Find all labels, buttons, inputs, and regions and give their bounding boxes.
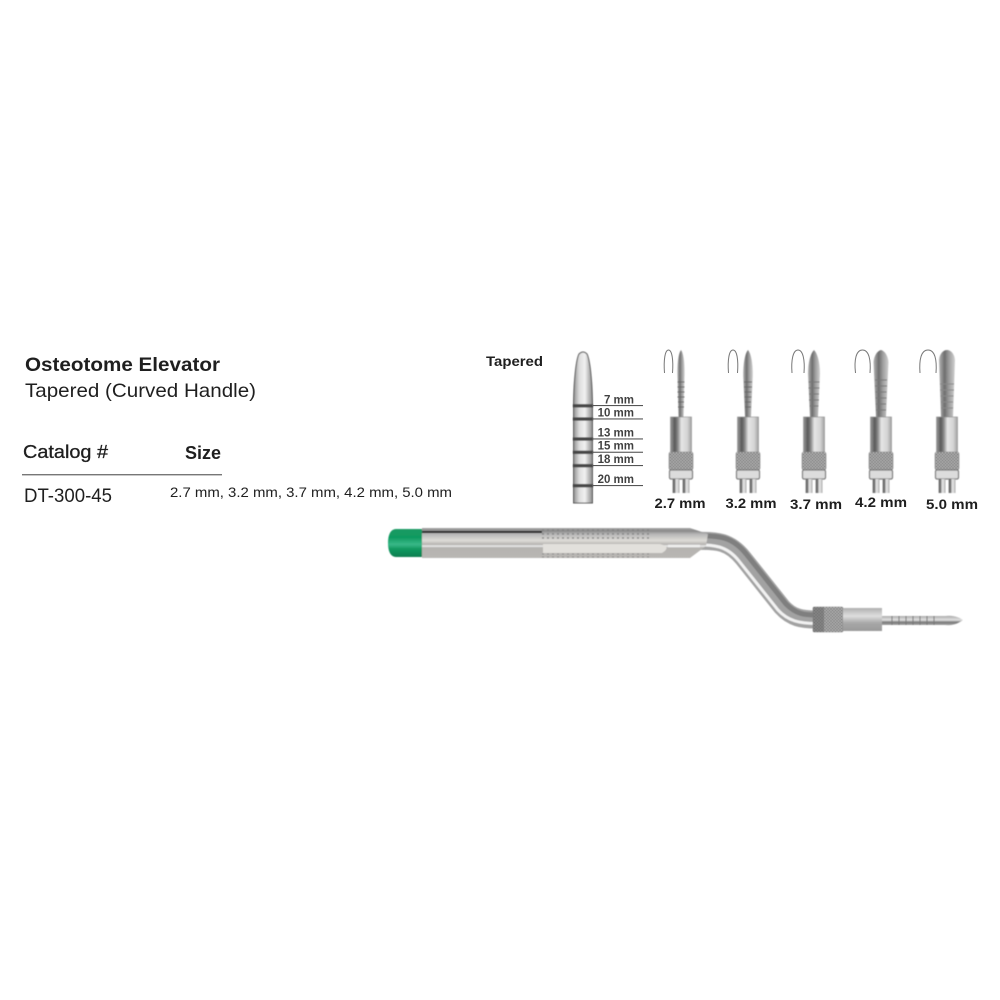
table: catalog and size	[22, 442, 452, 507]
size label 3.7: 3.7 mm	[790, 496, 842, 512]
curved handle instrument	[388, 528, 963, 632]
icon: clip 5.0	[920, 350, 936, 373]
size label 4.2: 4.2 mm	[855, 494, 907, 510]
title: Osteotome Elevator	[25, 355, 221, 376]
size label 2.7: 2.7 mm	[654, 495, 706, 511]
icon: clip 4.2	[855, 350, 870, 373]
depth gauge diagram: 15 mm	[598, 440, 634, 452]
size label 5.0: 5.0 mm	[926, 496, 978, 512]
depth gauge diagram: 7 mm	[604, 394, 634, 406]
depth gauge diagram: 13 mm	[598, 428, 634, 440]
column header: catalog number: Catalog #	[23, 442, 108, 462]
icon: clip 2.7	[664, 350, 673, 373]
drill 3.2 mm	[726, 350, 776, 511]
size label 3.2: 3.2 mm	[726, 495, 776, 511]
drill 5.0 mm	[920, 350, 978, 512]
drill 4.2 mm	[855, 350, 907, 510]
drill 3.7 mm	[790, 350, 842, 512]
depth gauge diagram: 10 mm	[598, 408, 634, 420]
subtitle: Tapered (Curved Handle)	[25, 380, 256, 402]
depth gauge diagram	[573, 352, 643, 503]
icon: clip 3.7	[792, 350, 804, 373]
handle body	[422, 528, 708, 558]
size list: 2.7 mm, 3.2 mm, 3.7 mm, 4.2 mm, 5.0 mm	[170, 484, 452, 500]
knurled collar	[813, 607, 843, 632]
catalog number: DT-300-45	[24, 486, 112, 507]
green end cap	[388, 529, 422, 557]
tapered label: Tapered	[486, 353, 543, 369]
depth gauge diagram: 18 mm	[598, 454, 634, 466]
column header: size: Size	[185, 443, 221, 463]
depth gauge diagram: 20 mm	[598, 474, 634, 486]
neck	[690, 536, 816, 624]
working tip	[882, 616, 963, 625]
icon: clip 3.2	[728, 350, 738, 373]
drill 2.7 mm	[654, 350, 706, 511]
